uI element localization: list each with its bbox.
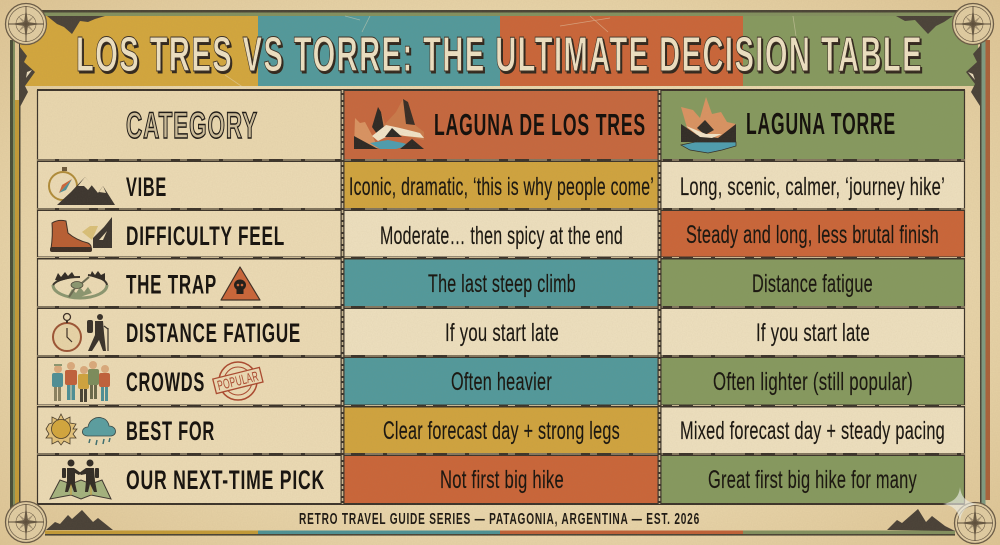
icon: popular stamp: POPULAR [216,368,260,393]
icon: skull warning triangle [221,267,260,300]
label: the trap: THE TRAP [126,270,217,300]
bottom left mountains [46,510,113,530]
Los Tres heading: LAGUNA DE LOS TRES [434,107,646,142]
row: vibe [49,167,945,205]
label: best for: BEST FOR [126,416,215,446]
label: crowds: CROWDS [126,367,205,397]
cell: trap Los Tres: The last steep climb [428,270,576,298]
row 4 fills [37,308,341,357]
row: crowds [52,361,913,402]
header cell: category [37,90,341,160]
icon: Torre mountains [681,97,736,153]
label: vibe: VIBE [126,172,167,202]
icon: hikers on a map [50,460,111,499]
compass: top right [952,4,994,44]
icon: boot and rock [50,217,112,252]
label: difficulty feel: DIFFICULTY FEEL [126,221,285,251]
row: best for [46,414,945,446]
icon: group of hikers [52,361,110,402]
row 3 fills [37,258,341,308]
icon: bear trap [53,271,107,298]
row: trap [53,267,873,300]
icon: Los Tres mountains [354,99,424,149]
icon: stopwatch and hiker [53,314,108,351]
cell: distance Torre: If you start late [756,319,870,347]
row 6 fills [37,406,341,454]
row 7 fills [37,454,341,504]
table [37,90,965,504]
title band [20,16,978,92]
footer text: RETRO TRAVEL GUIDE SERIES — PATAGONIA, ARGENTINA — EST. 2026 [299,511,700,528]
icon: popular stamp [213,362,263,400]
row 5 fills [37,357,341,406]
cell: trap Torre: Distance fatigue [752,270,873,298]
row: difficulty [50,217,939,252]
row: distance fatigue [53,314,870,351]
cell: best Los Tres: Clear forecast day + strong legs [383,417,620,445]
cell: pick Los Tres: Not first big hike [440,466,564,494]
row 1 fills [37,160,341,210]
cell: vibe Los Tres: Iconic, dramatic, ‘this is why people come’ [349,173,654,201]
cell: crowds Los Tres: Often heavier [451,368,552,396]
icon: compass and mountains [49,167,115,205]
header cell: Laguna Torre [661,90,965,160]
label: distance fatigue: DISTANCE FATIGUE [126,318,301,348]
cell: distance Los Tres: If you start late [445,319,559,347]
header cell: Laguna de los Tres [344,90,658,160]
category heading: CATEGORY [126,105,258,146]
compass: top left [6,4,46,44]
bottom right mountains [887,509,955,531]
table rules [37,90,965,504]
cell: difficulty Los Tres: Moderate… then spicy at the end [380,222,623,250]
sparkle mark [943,487,977,522]
label: our next-time pick: OUR NEXT-TIME PICK [126,465,325,495]
compass: bottom right [954,502,996,544]
corner mountain ornaments [20,16,980,107]
row 2 fills [37,210,341,258]
icon: sun and rain cloud [46,414,116,445]
row: next-time pick [50,460,917,499]
compass: bottom left [6,502,46,542]
